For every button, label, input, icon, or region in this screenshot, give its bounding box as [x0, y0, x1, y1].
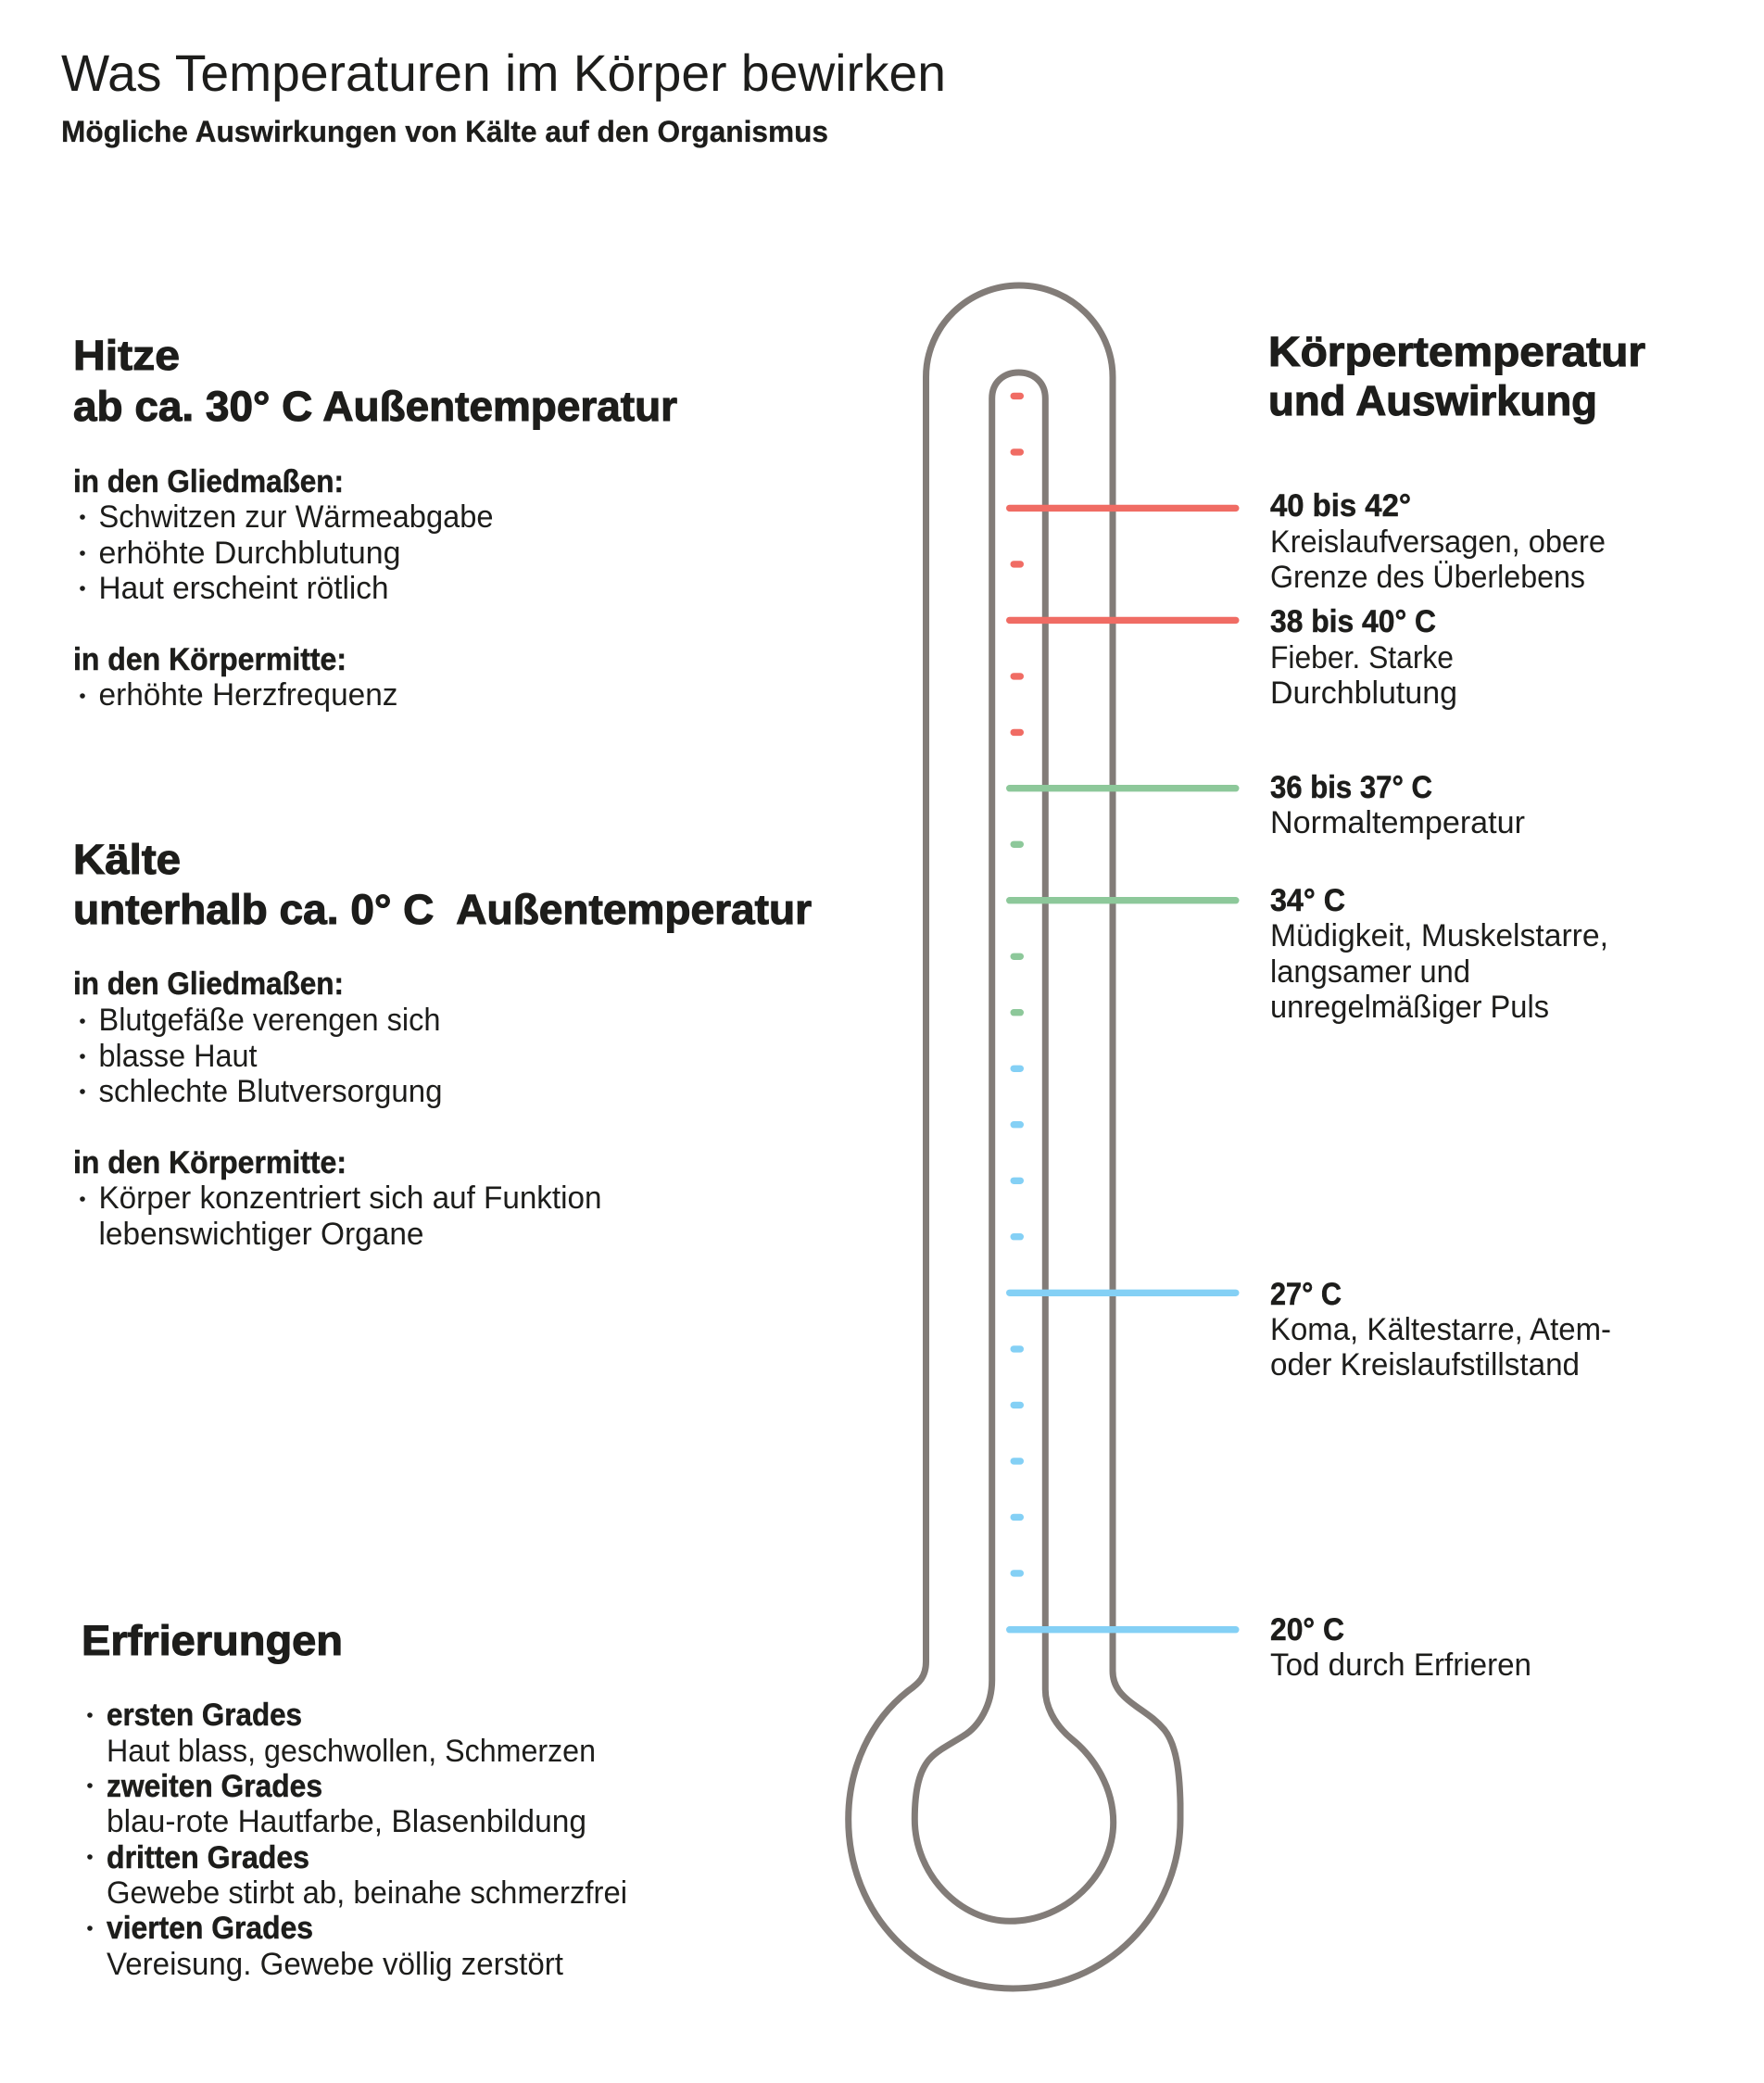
text block: Körpermitte bei Kälte [73, 1145, 602, 1252]
label: 38 bis 40° C: Fieber. Starke [1270, 640, 1454, 675]
label: 20° C: 20° C [1270, 1612, 1344, 1647]
heading: Hitze [73, 332, 677, 430]
label: 27° C [1270, 1277, 1611, 1382]
label: 20° C: Tod durch Erfrieren [1270, 1647, 1531, 1683]
panel: Körpertemperatur und Auswirkung [1268, 328, 1645, 1683]
text block: zweiten Grades: blau-rote Hautfarbe, Blasenbildung [107, 1804, 586, 1839]
label: 38 bis 40° C: 38 bis 40° C [1270, 604, 1436, 639]
text block: Gliedmaßen bei Hitze: erhöhte Durchblutung [98, 536, 400, 571]
label: 40 bis 42°: 40 bis 42° [1270, 488, 1411, 524]
text block: Körpermitte bei Hitze: in den Körpermitte: [73, 642, 346, 677]
text block: Körpermitte bei Kälte: in den Körpermitte: [73, 1145, 346, 1180]
label: 36 bis 37° C [1270, 770, 1525, 840]
text block: Gliedmaßen bei Hitze: Schwitzen zur Wärmeabgabe [98, 499, 493, 535]
text block: zweiten Grades: zweiten Grades [107, 1769, 322, 1804]
text block: vierten Grades [87, 1911, 564, 1982]
label: 34° C: unregelmäßiger Puls [1270, 990, 1549, 1025]
heading: Hitze: Hitze [73, 332, 180, 379]
text block: ersten Grades: Haut blass, geschwollen, Schmerzen [107, 1734, 596, 1769]
label: 27° C: Koma, Kältestarre, Atem- [1270, 1312, 1611, 1347]
text block: Körpermitte bei Hitze [73, 642, 398, 713]
text block: Gliedmaßen bei Kälte: Blutgefäße verengen sich [98, 1003, 441, 1038]
text block: ersten Grades [87, 1698, 596, 1769]
text block: dritten Grades: Gewebe stirbt ab, beinahe schmerzfrei [107, 1875, 627, 1911]
heading: Körpertemperatur und Auswirkung: und Auswirkung [1268, 377, 1597, 424]
label: 38 bis 40° C: Durchblutung [1270, 675, 1457, 711]
title: Was Temperaturen im Körper bewirken [61, 44, 946, 102]
label: 38 bis 40° C [1270, 604, 1457, 711]
heading: Kälte [73, 836, 812, 933]
label: 34° C: Müdigkeit, Muskelstarre, [1270, 918, 1608, 953]
label: 34° C: 34° C [1270, 883, 1345, 918]
panel: Hitze [73, 332, 677, 713]
heading: Kälte: Kälte [73, 836, 181, 883]
text block: Gliedmaßen bei Kälte: blasse Haut [98, 1039, 258, 1074]
text block: ersten Grades: ersten Grades [107, 1698, 302, 1733]
heading: Erfrierungen: Erfrierungen [82, 1617, 343, 1664]
label: 27° C: 27° C [1270, 1277, 1342, 1312]
text block: Gliedmaßen bei Hitze: Haut erscheint rötlich [98, 571, 389, 606]
label: 40 bis 42°: Kreislaufversagen, obere [1270, 524, 1606, 560]
subtitle: Mögliche Auswirkungen von Kälte auf den Organismus [61, 115, 828, 148]
text block: dritten Grades [87, 1840, 627, 1911]
label: 36 bis 37° C: Normaltemperatur [1270, 805, 1525, 840]
text block: Gliedmaßen bei Hitze: in den Gliedmaßen: [73, 464, 344, 499]
heading: Kälte: unterhalb ca. 0° C Außentemperatur [73, 886, 812, 933]
text block: Körpermitte bei Kälte: lebenswichtiger Organe [98, 1217, 424, 1252]
text block: Gliedmaßen bei Kälte [73, 966, 443, 1109]
text block: vierten Grades: vierten Grades [107, 1911, 313, 1946]
thermometer [849, 285, 1240, 1988]
heading: Körpertemperatur und Auswirkung [1268, 328, 1645, 424]
text block: Körpermitte bei Kälte: Körper konzentriert sich auf Funktion [98, 1180, 602, 1216]
label: 40 bis 42°: Grenze des Überlebens [1270, 560, 1585, 595]
text block: zweiten Grades [87, 1769, 586, 1839]
label: 40 bis 42° [1270, 488, 1606, 595]
panel: Erfrierungen [82, 1617, 627, 1982]
green scale marks [1006, 785, 1240, 1016]
label: 34° C: langsamer und [1270, 954, 1470, 990]
red scale marks [1006, 393, 1240, 736]
heading: Hitze: ab ca. 30° C Außentemperatur [73, 383, 677, 430]
heading: Körpertemperatur und Auswirkung: Körpertemperatur [1268, 328, 1645, 375]
label: 20° C [1270, 1612, 1531, 1683]
blue scale marks [1006, 1066, 1240, 1633]
label: 36 bis 37° C: 36 bis 37° C [1270, 770, 1432, 805]
text block: Gliedmaßen bei Hitze [73, 464, 493, 606]
text block: dritten Grades: dritten Grades [107, 1840, 309, 1875]
label: 27° C: oder Kreislaufstillstand [1270, 1347, 1580, 1382]
text block: Körpermitte bei Hitze: erhöhte Herzfrequenz [98, 677, 398, 713]
thermometer inner tube [914, 372, 1114, 1921]
thermometer outer contour [849, 285, 1180, 1988]
panel: Kälte [73, 836, 812, 1252]
text block: Gliedmaßen bei Kälte: schlechte Blutversorgung [98, 1074, 443, 1109]
label: 34° C [1270, 883, 1608, 1025]
text block: vierten Grades: Vereisung. Gewebe völlig zerstört [107, 1947, 564, 1982]
text block: Gliedmaßen bei Kälte: in den Gliedmaßen: [73, 966, 344, 1002]
